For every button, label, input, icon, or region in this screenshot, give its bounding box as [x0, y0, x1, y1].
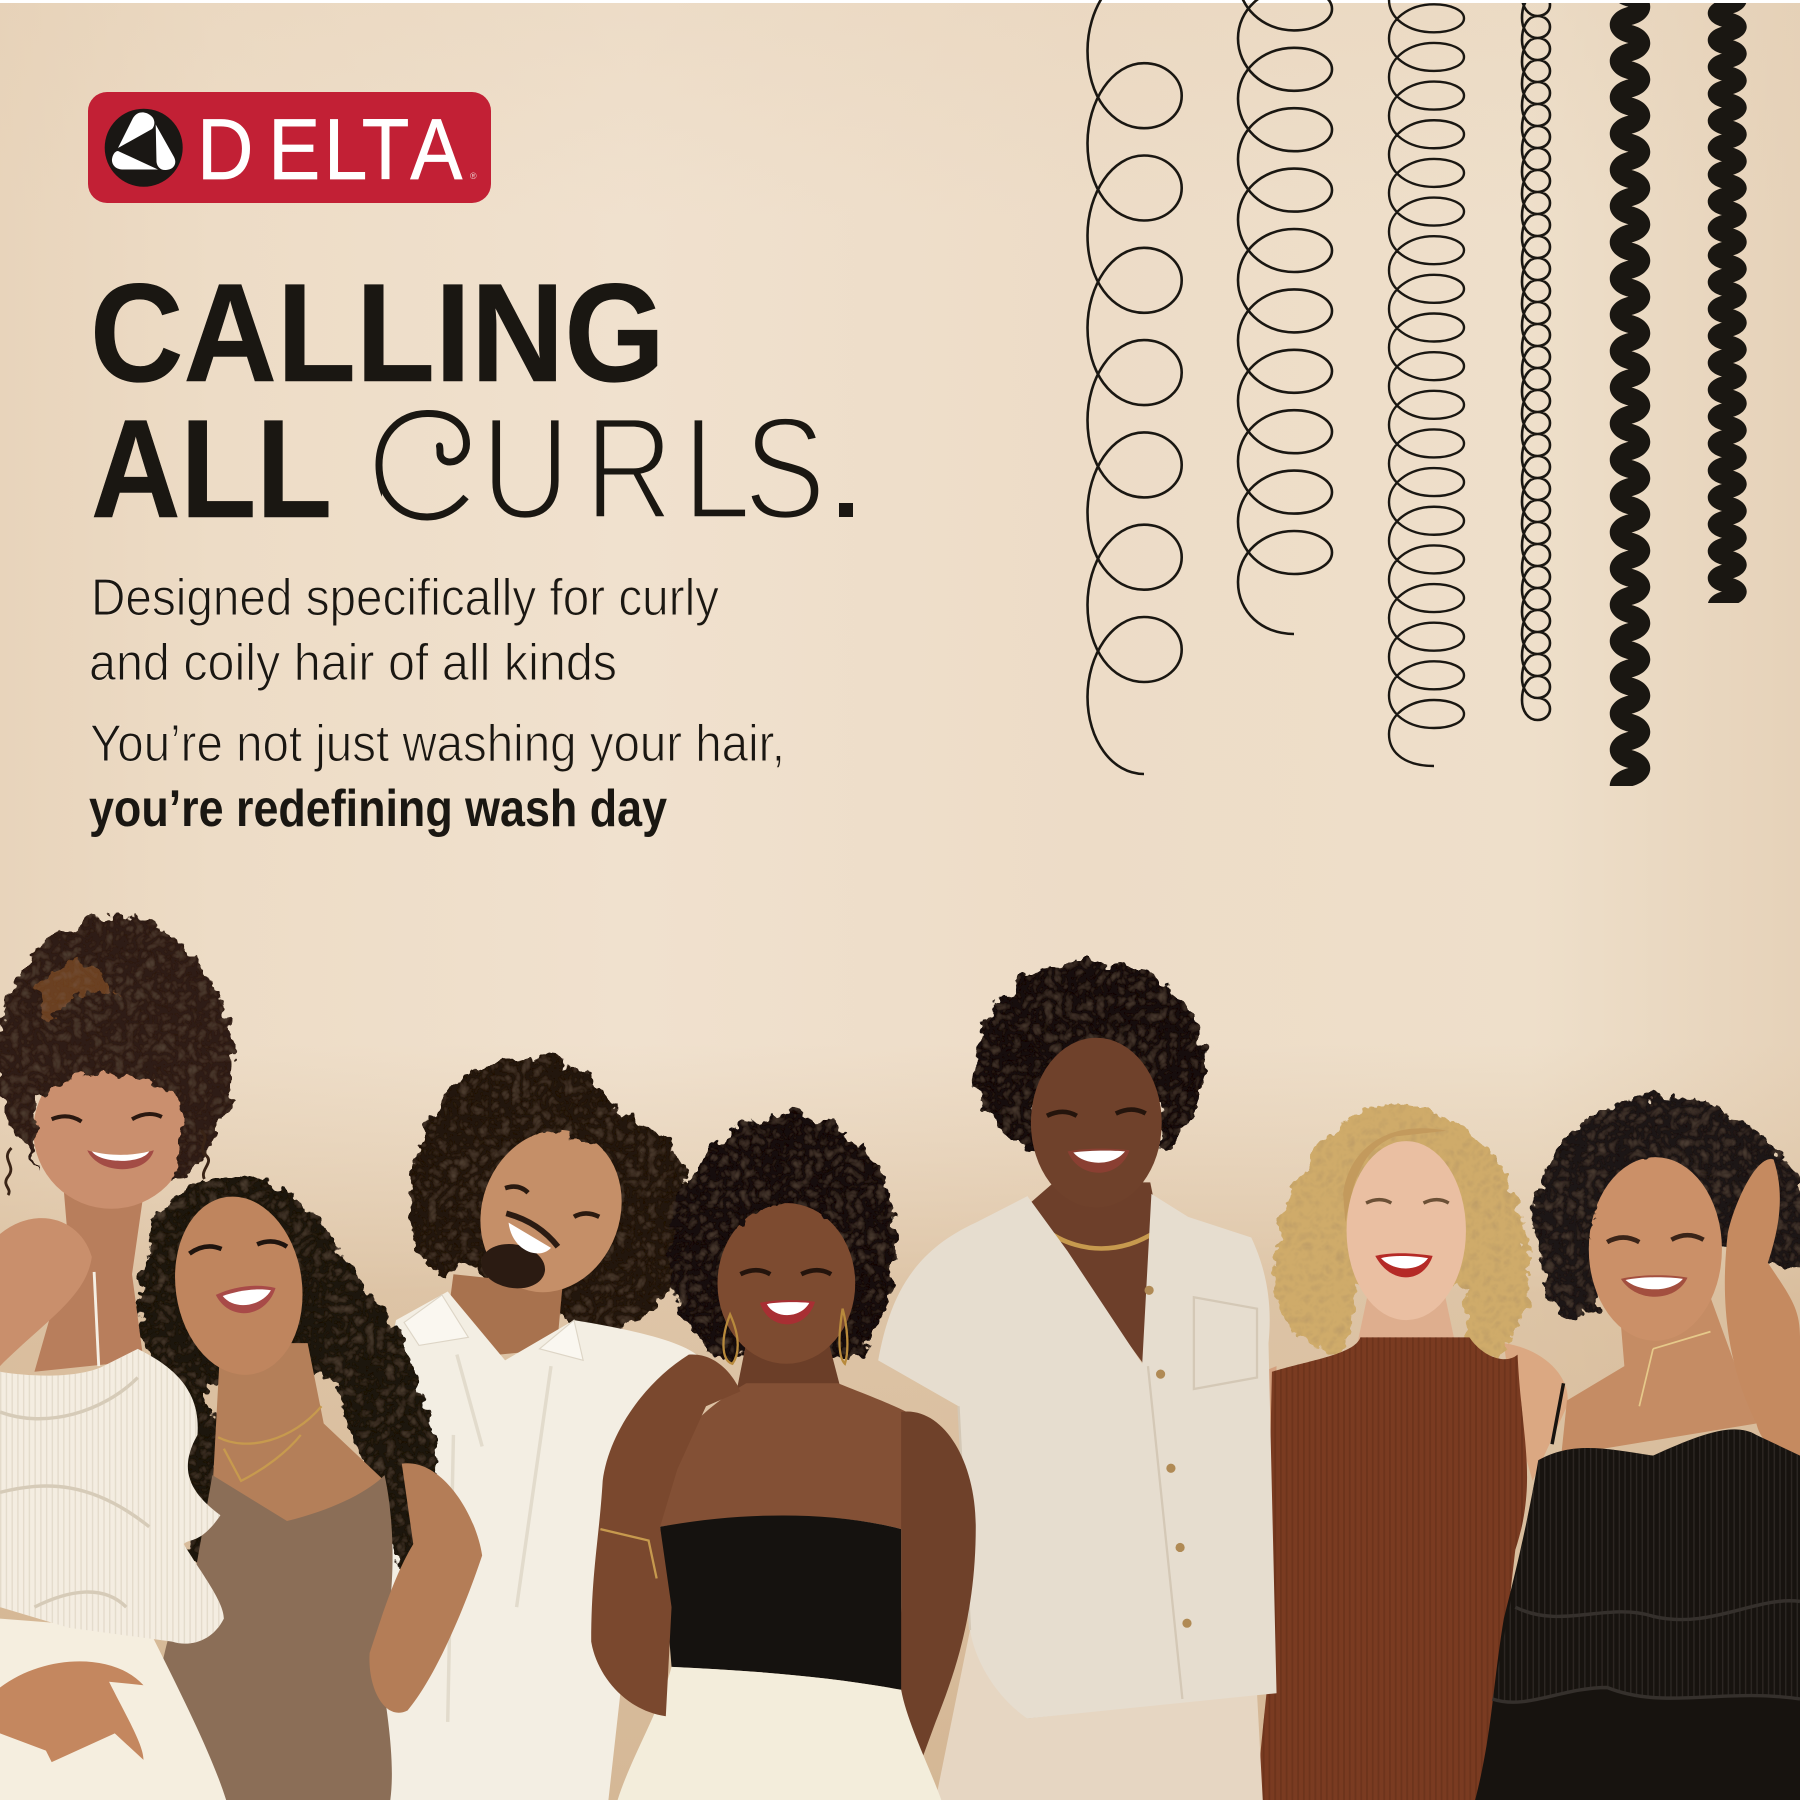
title: Calling All Curls: ALL	[91, 390, 332, 547]
logo: Delta	[88, 92, 491, 203]
curl: medium	[1238, 0, 1332, 634]
curl: coil	[1522, 0, 1550, 720]
text: tagline	[89, 715, 785, 838]
text: tagline: You’re not just washing your hair,	[90, 715, 785, 773]
person 3: man in white polo	[373, 1058, 703, 1800]
person 5: tall woman in linen shirt	[878, 961, 1277, 1800]
person 7: woman in black top	[1475, 1096, 1800, 1800]
text: tagline: you’re redefining wash day	[89, 780, 667, 838]
curl patterns	[1088, 0, 1747, 822]
title: Calling All Curls	[94, 283, 853, 520]
logo wordmark: DELTA	[197, 102, 462, 198]
curl: thick tight coil	[1708, 0, 1747, 645]
curl: thick zigzag	[1610, 0, 1650, 822]
curl: loose wave	[1088, 0, 1182, 774]
text: description: and coily hair of all kinds	[89, 634, 617, 692]
group photo of seven people	[0, 916, 1800, 1800]
text: description	[89, 569, 719, 692]
icon: delta triangle badge	[105, 109, 183, 187]
curl: tight spiral	[1389, 0, 1464, 766]
title: Calling All Curls: CALLING	[90, 254, 665, 411]
person 1: woman with curly updo in white ruffle top	[0, 916, 234, 1800]
person 6: blonde woman in rust dress	[1249, 1104, 1568, 1800]
title: Calling All Curls: CURLS.	[368, 387, 863, 550]
person 2: woman with long dark hair in taupe dress	[139, 1175, 482, 1800]
registered mark: ®	[470, 171, 477, 181]
person 4: woman in black bandeau	[591, 1114, 976, 1800]
text: description: Designed specifically for curly	[91, 569, 719, 627]
